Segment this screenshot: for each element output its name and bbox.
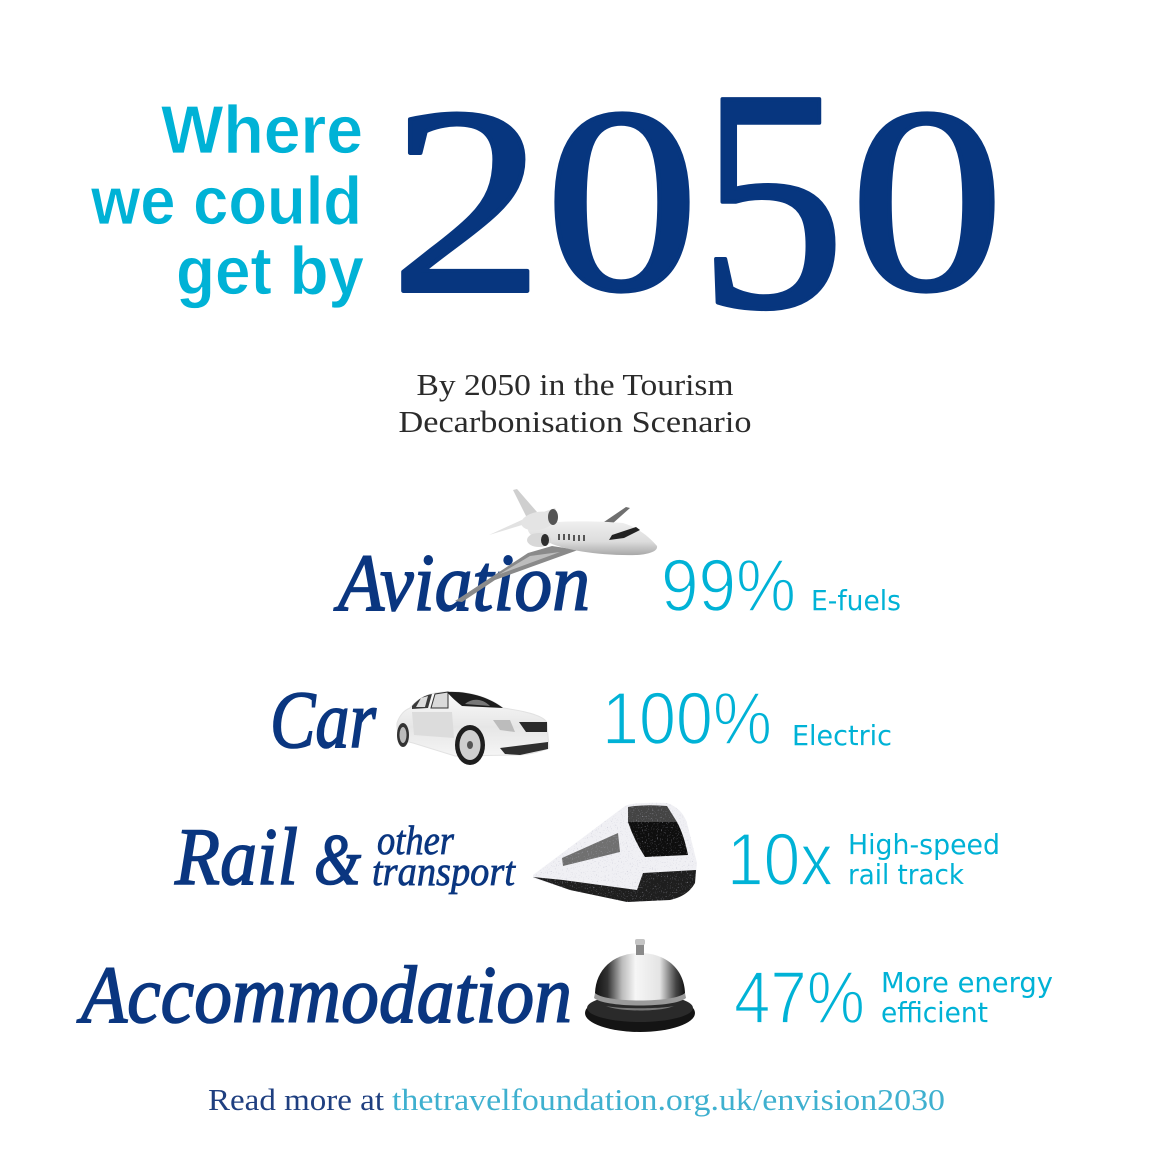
icon: private jet bbox=[455, 489, 657, 602]
more energy efficient label: More energy bbox=[881, 966, 1053, 999]
e-fuels label: E-fuels bbox=[811, 584, 901, 617]
icon: white car bbox=[397, 692, 549, 765]
high-speed rail track label: rail track bbox=[848, 858, 965, 891]
row: accommodation bbox=[76, 939, 1053, 1040]
title: where we could get by: get by bbox=[176, 233, 364, 309]
title: 2050: 2 bbox=[390, 53, 544, 349]
title: where we could get by: Where bbox=[161, 92, 363, 168]
rail heading bbox=[174, 811, 517, 902]
footer link line: thetravelfoundation.org.uk/envision2030 bbox=[392, 1082, 945, 1117]
100 percent: 100% bbox=[602, 677, 772, 760]
subtitle bbox=[398, 367, 752, 439]
title: 2050: 0 bbox=[545, 54, 699, 347]
99 percent: 99% bbox=[661, 544, 796, 627]
rail heading: Rail bbox=[174, 811, 298, 902]
icon: high-speed train bbox=[533, 803, 697, 902]
title: where we could get by: we could bbox=[90, 163, 362, 239]
car heading: Car bbox=[270, 674, 377, 765]
rail heading: transport bbox=[372, 848, 517, 894]
accommodation heading: Accommodation bbox=[76, 949, 572, 1040]
47 percent: 47% bbox=[734, 956, 865, 1039]
row: rail bbox=[174, 803, 1000, 902]
footer link line bbox=[208, 1082, 945, 1117]
row: aviation bbox=[333, 489, 901, 628]
subtitle: By 2050 in the Tourism bbox=[416, 367, 734, 402]
row: car bbox=[270, 674, 892, 765]
icon: reception bell bbox=[585, 939, 695, 1032]
more energy efficient label bbox=[881, 966, 1053, 1029]
title: where we could get by bbox=[90, 92, 364, 309]
rail heading: other bbox=[377, 817, 455, 863]
title: 2050: 5 bbox=[699, 25, 845, 375]
footer link line: Read more at bbox=[208, 1082, 384, 1117]
rail heading: & bbox=[314, 820, 361, 900]
electric label: Electric bbox=[792, 719, 892, 752]
title: 2050: 0 bbox=[850, 54, 1004, 347]
title: 2050 bbox=[390, 25, 1004, 375]
high-speed rail track label: High-speed bbox=[848, 828, 1000, 861]
high-speed rail track label bbox=[848, 828, 1000, 891]
subtitle: Decarbonisation Scenario bbox=[398, 404, 752, 439]
10x: 10x bbox=[727, 818, 833, 901]
aviation heading: Aviation bbox=[333, 537, 590, 628]
more energy efficient label: efficient bbox=[881, 996, 988, 1029]
